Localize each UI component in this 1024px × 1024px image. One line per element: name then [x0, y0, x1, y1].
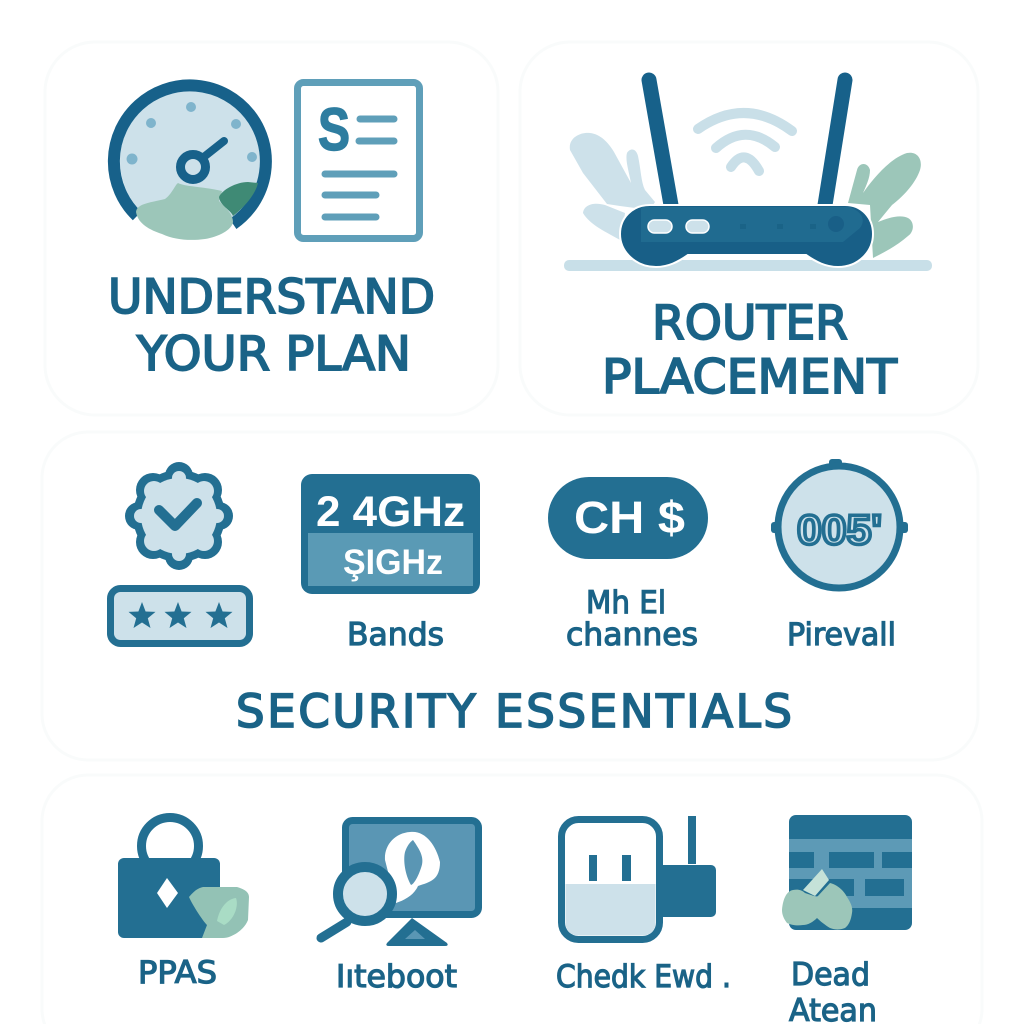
- heading: router placement: [602, 296, 898, 405]
- icon: frequency bands: 2 4GHz: [316, 488, 465, 536]
- label: iiteboot: Iıteboot: [336, 959, 457, 995]
- icon: channel pill: CH $: [574, 492, 685, 543]
- icon: extender plug: [562, 816, 716, 940]
- icon: bill document: [298, 82, 420, 238]
- label: channels: [566, 585, 698, 653]
- icon: verified badge: [125, 462, 233, 570]
- icon: brick firewall: [782, 815, 912, 930]
- icon: password stars: [110, 588, 250, 644]
- panel: bottom tools: [42, 775, 982, 1024]
- icon: frequency bands: [301, 474, 480, 594]
- panel: security essentials: [42, 432, 978, 760]
- panel: router placement: [520, 42, 978, 415]
- label: channels: Mh El: [586, 585, 666, 621]
- panel: understand your plan: [45, 42, 498, 415]
- icon: monitor with magnifier: [321, 820, 478, 946]
- label: dead atean: Dead: [791, 957, 870, 993]
- label: check ewd: Chedk Ewd .: [556, 959, 731, 995]
- label: dead atean: [789, 957, 877, 1024]
- icon: bill document: S: [318, 96, 350, 163]
- icon: padlock with leaf: [118, 818, 249, 938]
- label: firewall: Pirevall: [787, 617, 896, 653]
- icon: timer dial: [771, 459, 908, 588]
- heading: router placement: PLACEMENT: [602, 350, 898, 405]
- icon: channel pill: [548, 477, 708, 559]
- label: channels: channes: [566, 617, 698, 653]
- heading: understand your plan: YOUR PLAN: [136, 327, 411, 382]
- heading: router placement: ROUTER: [652, 296, 848, 351]
- label: bands: Bands: [347, 617, 444, 653]
- icon: router with leaves: [564, 80, 932, 271]
- heading: understand your plan: UNDERSTAND: [108, 270, 435, 325]
- heading: understand your plan: [108, 270, 435, 382]
- icon: frequency bands: ŞIGHz: [343, 543, 443, 582]
- icon: timer dial: 005': [797, 506, 882, 553]
- label: ppas: PPAS: [138, 955, 217, 991]
- icon: speed gauge: [114, 85, 266, 240]
- heading: security essentials: SECURITY ESSENTIALS: [236, 685, 792, 738]
